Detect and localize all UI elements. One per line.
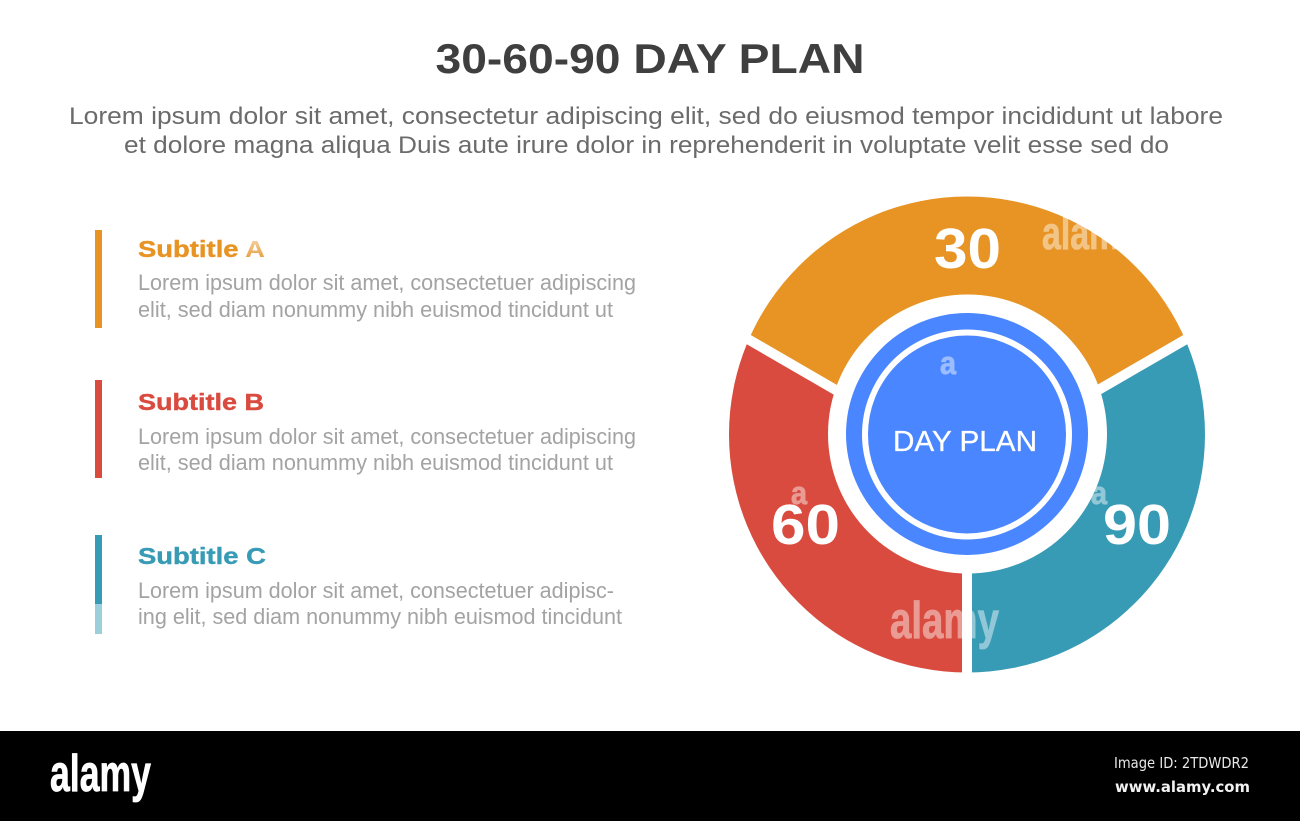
- label: 60: 60: [771, 493, 840, 557]
- watermark fragments: a: [940, 345, 956, 381]
- text: subtitle C: [138, 578, 622, 629]
- watermark fragments: [791, 207, 1138, 650]
- center white ring: [828, 294, 1107, 574]
- bar: subtitle C: [95, 535, 102, 634]
- watermark fragments: alamy: [890, 592, 999, 650]
- chart: circular day plan diagram: [729, 196, 1205, 672]
- segment: 90 days: [972, 344, 1205, 672]
- text: subtitle C: ing elit, sed diam nonummy nibh euismod tincidunt: [138, 604, 622, 629]
- footer url: www.alamy.com: [1115, 778, 1250, 796]
- watermark fragments: a: [1091, 475, 1107, 511]
- heading: subtitle C: Subtitle C: [138, 543, 266, 569]
- heading: subtitle A: Subtitle A: [138, 236, 265, 262]
- center label: DAY PLAN: [893, 426, 1037, 458]
- title: 30-60-90 DAY PLAN: [436, 35, 864, 82]
- center inner ring: [865, 332, 1069, 536]
- bar: subtitle A: [95, 230, 102, 328]
- text: subtitle B: [138, 424, 636, 475]
- panel: subtitle C: [95, 535, 622, 634]
- segment: 60 days: [729, 344, 962, 672]
- text: subtitle A: elit, sed diam nonummy nibh euismod tincidunt ut: [138, 297, 613, 322]
- panel: subtitle B: [95, 380, 636, 478]
- panel: subtitle A: [95, 230, 636, 328]
- center blue disc: [846, 313, 1088, 555]
- text: subtitle B: elit, sed diam nonummy nibh euismod tincidunt ut: [138, 450, 613, 475]
- bar: subtitle B: [95, 380, 102, 478]
- segment dividers: [720, 323, 1214, 680]
- intro text: [69, 103, 1223, 159]
- intro text: Lorem ipsum dolor sit amet, consectetur adipiscing elit, sed do eiusmod tempor incididunt ut labore: [69, 103, 1223, 130]
- label: 30: 30: [934, 217, 1001, 281]
- text: subtitle C: Lorem ipsum dolor sit amet, consectetuer adipisc-: [138, 578, 614, 603]
- watermark fragments: a: [791, 475, 807, 511]
- text: subtitle A: Lorem ipsum dolor sit amet, consectetuer adipiscing: [138, 270, 636, 295]
- watermark fragments: alamy: [1042, 207, 1138, 259]
- text: subtitle B: Lorem ipsum dolor sit amet, consectetuer adipiscing: [138, 424, 636, 449]
- segment: 30 days: [750, 196, 1184, 385]
- heading: subtitle B: Subtitle B: [138, 389, 264, 415]
- footer image id: Image ID: 2TDWDR2: [1114, 754, 1249, 772]
- text: subtitle A: [138, 270, 636, 322]
- footer logo: alamy: [50, 745, 151, 803]
- label: 90: 90: [1103, 493, 1171, 557]
- footer bar: [0, 731, 1300, 821]
- intro text: et dolore magna aliqua Duis aute irure dolor in reprehenderit in voluptate velit esse sed do: [124, 132, 1169, 159]
